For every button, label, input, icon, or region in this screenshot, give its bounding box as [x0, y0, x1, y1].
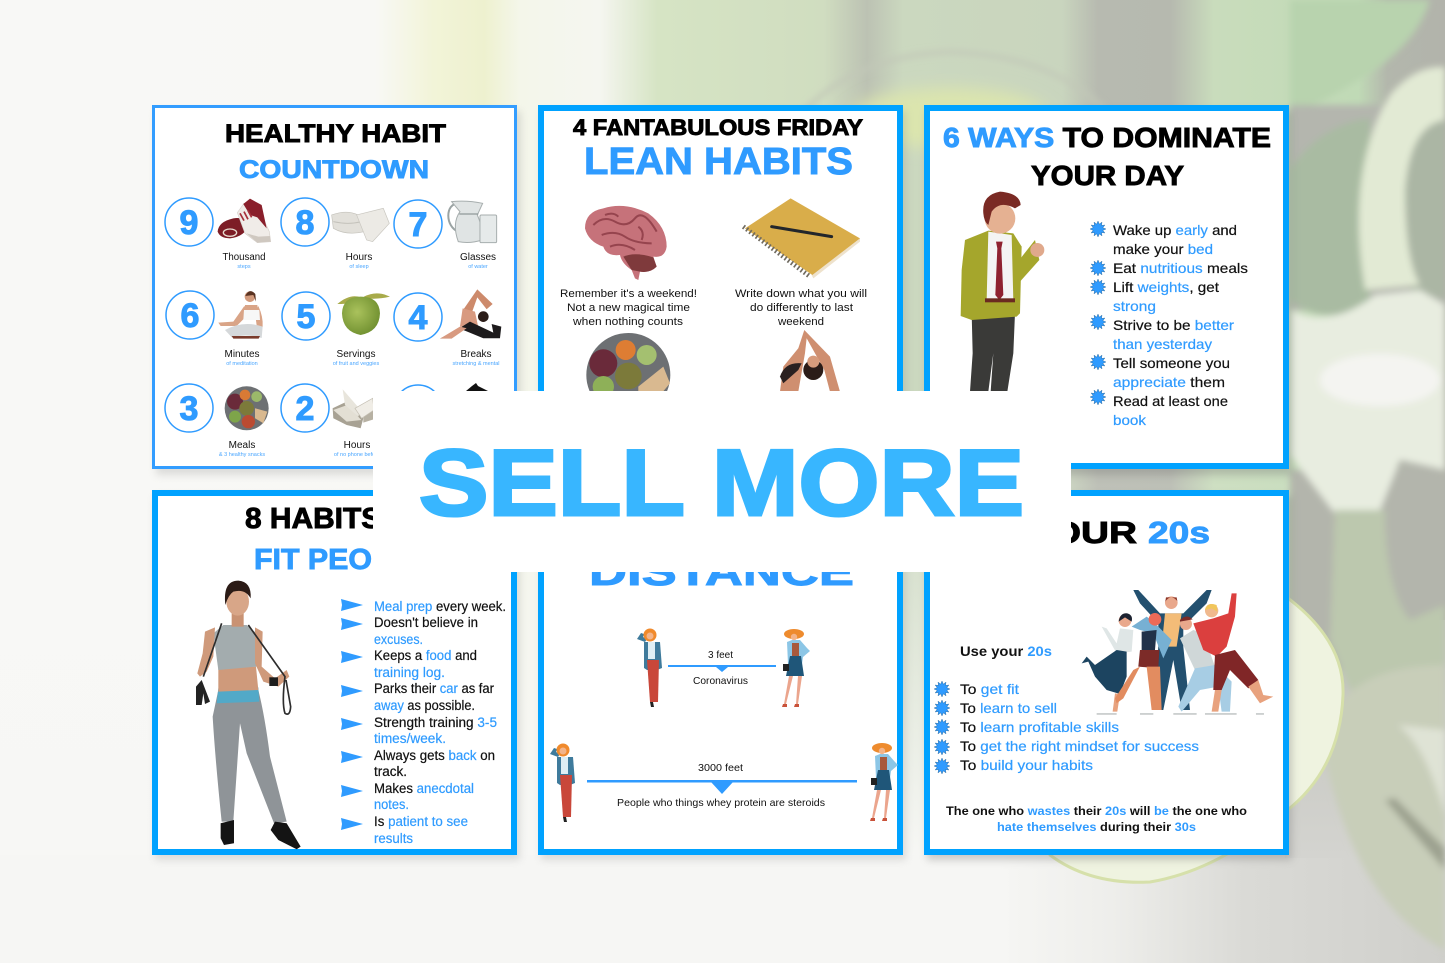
- text: remember it's a weekend: [560, 288, 697, 328]
- list: eight habits: Doesn't believe in: [374, 615, 478, 630]
- labels: daily targets: Minutes: [224, 349, 260, 360]
- countdown circles and numbers: 7: [409, 206, 427, 244]
- list: six ways: [1113, 222, 1248, 428]
- banner: sell more: SELL MORE: [419, 430, 1024, 535]
- heading: fit people: FIT PEOPLE: [254, 544, 431, 576]
- labels: daily targets: [219, 252, 500, 458]
- heading: 4 fantabulous friday: 4 FANTABULOUS FRIDAY: [573, 115, 863, 140]
- panel: your 20s: [927, 493, 1292, 860]
- list: eight habits: results: [374, 831, 413, 846]
- text: write down what you will do differently: do differently to last: [750, 302, 853, 314]
- list: eight habits: times/week.: [374, 731, 446, 746]
- list: arrows: [341, 599, 363, 830]
- heading: 6 ways to dominate: 6 WAYS TO DOMINATE: [943, 122, 1271, 153]
- panel: healthy habit countdown: [154, 106, 521, 475]
- label: whey protein: People who things whey protein are steroids: [617, 797, 825, 809]
- measure: 3000 feet line: [587, 780, 857, 794]
- labels: daily targets: Servings: [337, 349, 375, 360]
- list: eight habits: Parks their car as far: [374, 681, 494, 696]
- list: six ways: appreciate them: [1113, 374, 1225, 390]
- heading: your 20s: YOUR: [1025, 515, 1137, 550]
- heading: distance: DISTANCE: [589, 552, 854, 594]
- list: use your 20s items: To build your habits: [960, 757, 1093, 773]
- list: use your 20s items: [960, 681, 1199, 773]
- list: six ways: Read at least one: [1113, 393, 1228, 409]
- labels: daily targets: Thousand: [222, 252, 266, 263]
- heading: your day: YOUR DAY: [1031, 160, 1184, 191]
- list: six ways: strong: [1113, 298, 1156, 314]
- label: 3000 feet: 3000 feet: [698, 762, 743, 774]
- labels: daily targets: Glasses: [460, 252, 496, 263]
- heading: countdown: COUNTDOWN: [239, 156, 429, 184]
- label: coronavirus: Coronavirus: [693, 675, 748, 687]
- measure: 3 feet line: [668, 665, 776, 672]
- text: write down what you will do differently: [735, 288, 867, 328]
- list: eight habits: notes.: [374, 797, 409, 812]
- countdown circles and numbers: 4: [409, 299, 428, 337]
- countdown circles and numbers: 9: [180, 204, 198, 242]
- countdown circles and numbers: 5: [297, 298, 315, 336]
- icon: meditating woman: [218, 291, 263, 339]
- label: 3 feet: 3 feet: [708, 650, 733, 661]
- labels: daily targets: of no phone before: [334, 452, 380, 458]
- illustration: group of cheering friends: [1082, 590, 1273, 714]
- heading: lean habits: LEAN HABITS: [584, 141, 853, 183]
- list: bullets: [1090, 221, 1106, 405]
- panel: 6 ways to dominate your day: [927, 108, 1292, 475]
- illustration: man in olive jacket: [961, 192, 1044, 392]
- labels: daily targets: Hours: [344, 440, 370, 451]
- icon: pillows: [332, 208, 389, 242]
- list: use your 20s items: To learn to sell: [960, 700, 1057, 716]
- text: write down what you will do differently: Write down what you will: [735, 288, 867, 300]
- list: six ways: than yesterday: [1113, 336, 1212, 352]
- list: six ways: Lift weights , get: [1113, 279, 1219, 295]
- text: write down what you will do differently: weekend: [777, 316, 824, 328]
- icon: water jug and glass: [448, 201, 497, 243]
- icon: healthy food bowl: [225, 386, 269, 430]
- labels: daily targets: stretching & mental: [452, 361, 500, 367]
- list: bullets: [934, 681, 950, 774]
- list: eight habits: Strength training 3-5: [374, 715, 497, 730]
- labels: daily targets: Meals: [229, 440, 255, 451]
- text: remember it's a weekend: when nothing counts: [572, 316, 684, 328]
- labels: daily targets: Hours: [346, 252, 372, 263]
- labels: daily targets: & 3 healthy snacks: [219, 452, 265, 458]
- list: six ways: Strive to be better: [1113, 317, 1234, 333]
- list: use your 20s items: To learn profitable skills: [960, 719, 1119, 735]
- panel: 8 habits of fit people: [155, 493, 520, 860]
- callout: wastes their 20s: hate themselves during their 30s: [997, 820, 1196, 834]
- illustration: far distance woman right: [870, 743, 898, 821]
- heading: 8 habits of: 8 HABITS OF: [245, 503, 431, 535]
- countdown circles and numbers: [165, 198, 442, 433]
- list: eight habits: Is patient to see: [374, 814, 468, 829]
- countdown circles and numbers: 3: [180, 390, 198, 428]
- callout: wastes their 20s: The one who wastes their 20s will be the one who: [946, 804, 1247, 818]
- list: eight habits: training log.: [374, 665, 445, 680]
- list: use your 20s items: To get fit: [960, 681, 1019, 697]
- labels: daily targets: of fruit and veggies: [333, 361, 379, 367]
- list: eight habits: Makes anecdotal: [374, 781, 474, 796]
- text: remember it's a weekend: Remember it's a weekend!: [560, 288, 697, 300]
- icon: notebook and pen: [743, 198, 860, 278]
- list: six ways: book: [1113, 412, 1147, 428]
- icon: open book: [333, 389, 374, 428]
- callout: wastes their 20s: [946, 804, 1247, 834]
- list: six ways: Eat nutritious meals: [1113, 260, 1248, 276]
- icon: yoga pose: [440, 289, 501, 339]
- countdown circles and numbers: 6: [181, 297, 199, 335]
- list: eight habits: excuses.: [374, 632, 423, 647]
- list: eight habits: [374, 599, 506, 846]
- list: six ways: Tell someone you: [1113, 355, 1230, 371]
- list: eight habits: track.: [374, 764, 407, 779]
- labels: daily targets: of water: [468, 264, 488, 270]
- labels: daily targets: steps: [237, 264, 251, 270]
- labels: daily targets: of sleep: [349, 264, 369, 270]
- heading: healthy habit: HEALTHY HABIT: [225, 120, 446, 148]
- banner: sell more: [373, 391, 1071, 572]
- icon: partly hidden shoe: [466, 383, 488, 391]
- countdown circles and numbers: 2: [296, 390, 314, 428]
- text: remember it's a weekend: Not a new magical time: [567, 302, 690, 314]
- countdown circles and numbers: 8: [296, 204, 314, 242]
- illustration: far distance woman left: [550, 744, 575, 822]
- icon: green apple: [337, 293, 390, 335]
- panel: distance: [541, 493, 906, 860]
- illustration: small distance woman left: [637, 628, 662, 707]
- labels: daily targets: of meditation: [226, 361, 258, 367]
- list: use your 20s items: To get the right mindset for success: [960, 738, 1199, 754]
- list: six ways: Wake up early and: [1113, 222, 1237, 238]
- list: six ways: make your bed: [1113, 241, 1213, 257]
- icon: brain: [585, 206, 667, 280]
- illustration: small distance woman right: [782, 629, 810, 707]
- list: eight habits: Keeps a food and: [374, 648, 477, 663]
- list: eight habits: Meal prep every week.: [374, 599, 506, 614]
- labels: daily targets: Breaks: [460, 349, 492, 360]
- icon: food bowl: [586, 333, 670, 417]
- icon: sneakers: [218, 199, 271, 243]
- icon: yoga pose: [780, 330, 840, 392]
- list: eight habits: Always gets back on: [374, 748, 495, 763]
- heading: your 20s: 20s: [1148, 515, 1210, 550]
- list: eight habits: away as possible.: [374, 698, 475, 713]
- illustration: fit woman with jump rope: [196, 581, 301, 849]
- text: use your 20s: Use your 20s: [960, 643, 1052, 659]
- panel: lean habits: [541, 108, 906, 475]
- heading: your 20s: [1025, 515, 1210, 550]
